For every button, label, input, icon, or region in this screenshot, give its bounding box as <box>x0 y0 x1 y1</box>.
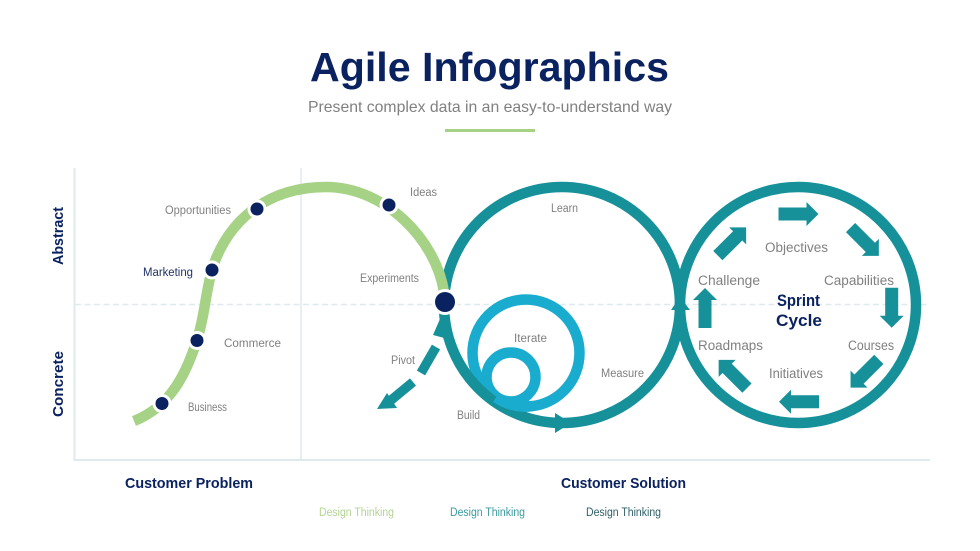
x axis label: customer problem: Customer Problem <box>125 475 253 492</box>
curve labels: Commerce <box>224 338 281 350</box>
legend <box>319 507 661 519</box>
curve labels: Iterate <box>514 333 547 345</box>
learn circle <box>433 187 680 433</box>
curve labels: Build <box>457 410 480 422</box>
subtitle: Present complex data in an easy-to-understand way <box>308 99 672 116</box>
green design thinking curve <box>134 187 444 421</box>
spiral overlap on ring <box>496 396 532 407</box>
curve labels: Marketing <box>143 267 193 279</box>
sprint cycle labels: Challenge <box>698 273 760 288</box>
sprint cycle arrows <box>693 202 904 414</box>
axis label: abstract: Abstract <box>51 207 67 265</box>
sprint cycle centre label <box>776 291 822 330</box>
curve labels: Pivot <box>391 355 416 367</box>
sprint cycle labels: Initiatives <box>769 366 823 381</box>
sprint cycle labels: Objectives <box>765 240 828 255</box>
sprint cycle centre label: Cycle <box>776 311 822 330</box>
legend: Design Thinking <box>450 507 525 519</box>
curve labels: Measure <box>601 368 644 380</box>
sprint cycle labels: Capabilities <box>824 273 894 288</box>
junction arrow <box>671 297 690 310</box>
sprint cycle labels: Courses <box>848 338 894 353</box>
curve labels: Learn <box>551 203 578 215</box>
x axis label: customer solution: Customer Solution <box>561 475 686 492</box>
curve labels: Opportunities <box>165 205 231 217</box>
legend: Design Thinking <box>319 507 394 519</box>
sprint cycle labels: Roadmaps <box>698 338 763 353</box>
axis label: concrete: Concrete <box>51 351 67 417</box>
curve labels: Business <box>188 402 227 414</box>
legend: Design Thinking <box>586 507 661 519</box>
chart axes <box>74 168 930 460</box>
pivot dashed arrow <box>377 347 436 409</box>
sprint cycle labels <box>698 240 894 381</box>
curve labels <box>143 187 644 422</box>
title: Agile Infographics <box>310 44 669 90</box>
title underline <box>445 129 535 132</box>
sprint cycle centre label: Sprint <box>777 291 820 310</box>
curve labels: Experiments <box>360 273 419 285</box>
curve labels: Ideas <box>410 187 437 199</box>
curve markers <box>152 196 398 413</box>
sprint cycle circle <box>680 187 916 423</box>
main junction marker <box>432 289 458 315</box>
iterate spiral <box>472 300 580 406</box>
